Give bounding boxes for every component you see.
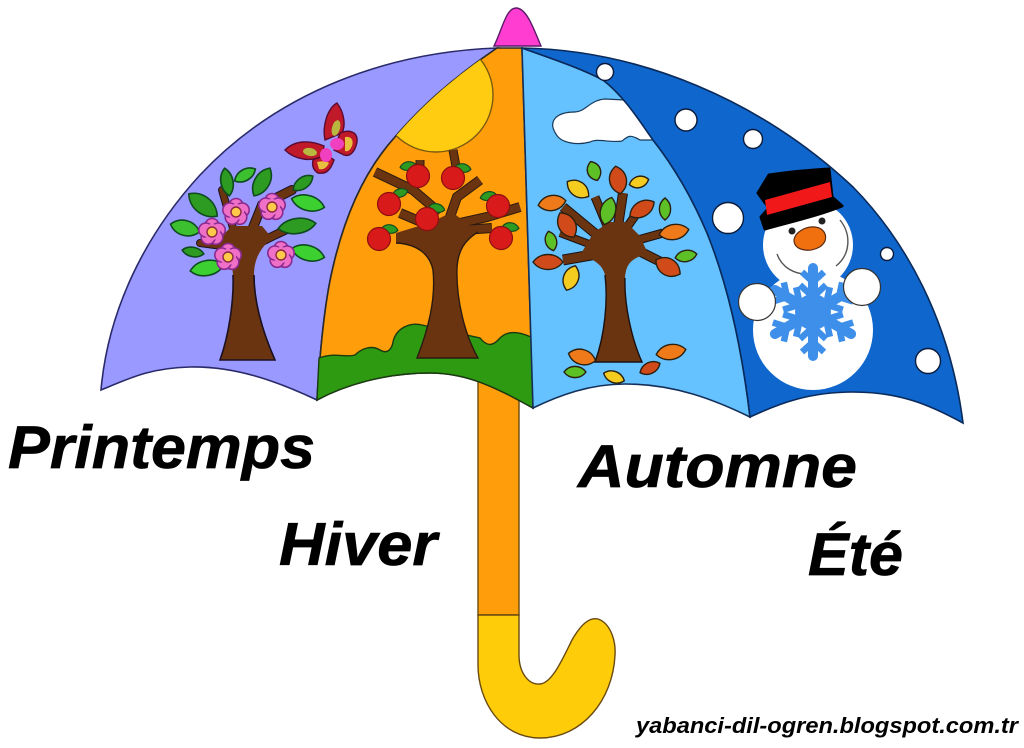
label: Automne: Automne xyxy=(576,433,857,500)
snowman xyxy=(738,169,880,390)
hands xyxy=(738,284,776,320)
panel: automne xyxy=(522,48,750,417)
handle hook xyxy=(478,615,615,738)
icon: snowflake xyxy=(768,268,858,356)
panel background xyxy=(522,48,963,423)
panel background xyxy=(101,48,497,400)
umbrella finial xyxy=(494,8,541,46)
panel background xyxy=(522,48,750,417)
snowballs xyxy=(596,64,940,374)
label: Printemps: Printemps xyxy=(8,414,315,481)
nose and eyes xyxy=(794,227,826,250)
panel background xyxy=(317,48,533,408)
icon: cloud xyxy=(553,99,660,144)
umbrella handle xyxy=(478,380,615,738)
footer url: yabanci-dil-ogren.blogspot.com.tr xyxy=(635,713,1020,738)
smile xyxy=(777,220,848,274)
grass xyxy=(317,324,533,408)
head xyxy=(763,200,853,290)
body xyxy=(753,270,873,390)
panel: hiver xyxy=(317,38,533,408)
icon: butterfly xyxy=(285,103,357,173)
panel: ete xyxy=(522,48,963,423)
label: Été: Été xyxy=(808,521,903,588)
icon: sun xyxy=(396,59,494,153)
fallen leaves xyxy=(564,342,687,386)
fruit tree xyxy=(368,150,520,358)
hat xyxy=(758,169,842,229)
handle shaft xyxy=(478,380,519,615)
panel: printemps xyxy=(101,48,497,400)
blossom tree xyxy=(169,164,326,360)
autumn tree xyxy=(533,159,698,362)
label: Hiver: Hiver xyxy=(279,511,441,578)
